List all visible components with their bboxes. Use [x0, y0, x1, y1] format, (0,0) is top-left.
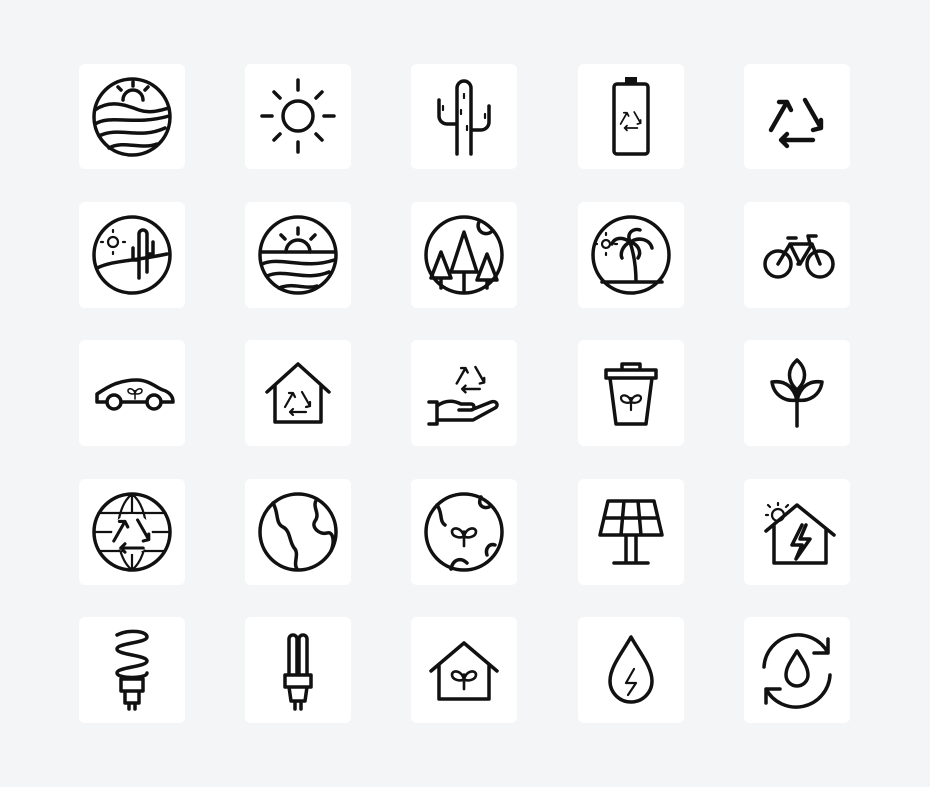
tile row 1 col 3: cactus [411, 64, 517, 169]
tile row 2 col 5: bicycle [744, 202, 850, 308]
tile row 5 col 2: tube bulb [245, 617, 351, 723]
tile row 1 col 5: recycle [744, 64, 850, 169]
tile row 5 col 5: water cycle [744, 617, 850, 723]
tile row 2 col 1: desert [79, 202, 185, 308]
tile row 4 col 2: earth [245, 479, 351, 585]
tile row 2 col 4: palm island [578, 202, 684, 308]
tile row 1 col 2: sun [245, 64, 351, 169]
tile row 1 col 4: battery [578, 64, 684, 169]
tile row 4 col 3: earth leaf [411, 479, 517, 585]
tile row 2 col 2: sunset [245, 202, 351, 308]
tile row 3 col 3: hand recycle [411, 340, 517, 446]
tile row 3 col 4: bin [578, 340, 684, 446]
tile row 3 col 2: house recycle [245, 340, 351, 446]
tile row 5 col 4: drop lightning [578, 617, 684, 723]
tile row 3 col 5: plant [744, 340, 850, 446]
tile row 4 col 4: solar panel [578, 479, 684, 585]
tile row 5 col 3: house leaf [411, 617, 517, 723]
tile row 5 col 1: spiral bulb [79, 617, 185, 723]
tile row 3 col 1: car [79, 340, 185, 446]
tile row 4 col 5: house lightning [744, 479, 850, 585]
tile row 2 col 3: forest [411, 202, 517, 308]
tile row 4 col 1: globe recycle [79, 479, 185, 585]
tile row 1 col 1: landscape [79, 64, 185, 169]
